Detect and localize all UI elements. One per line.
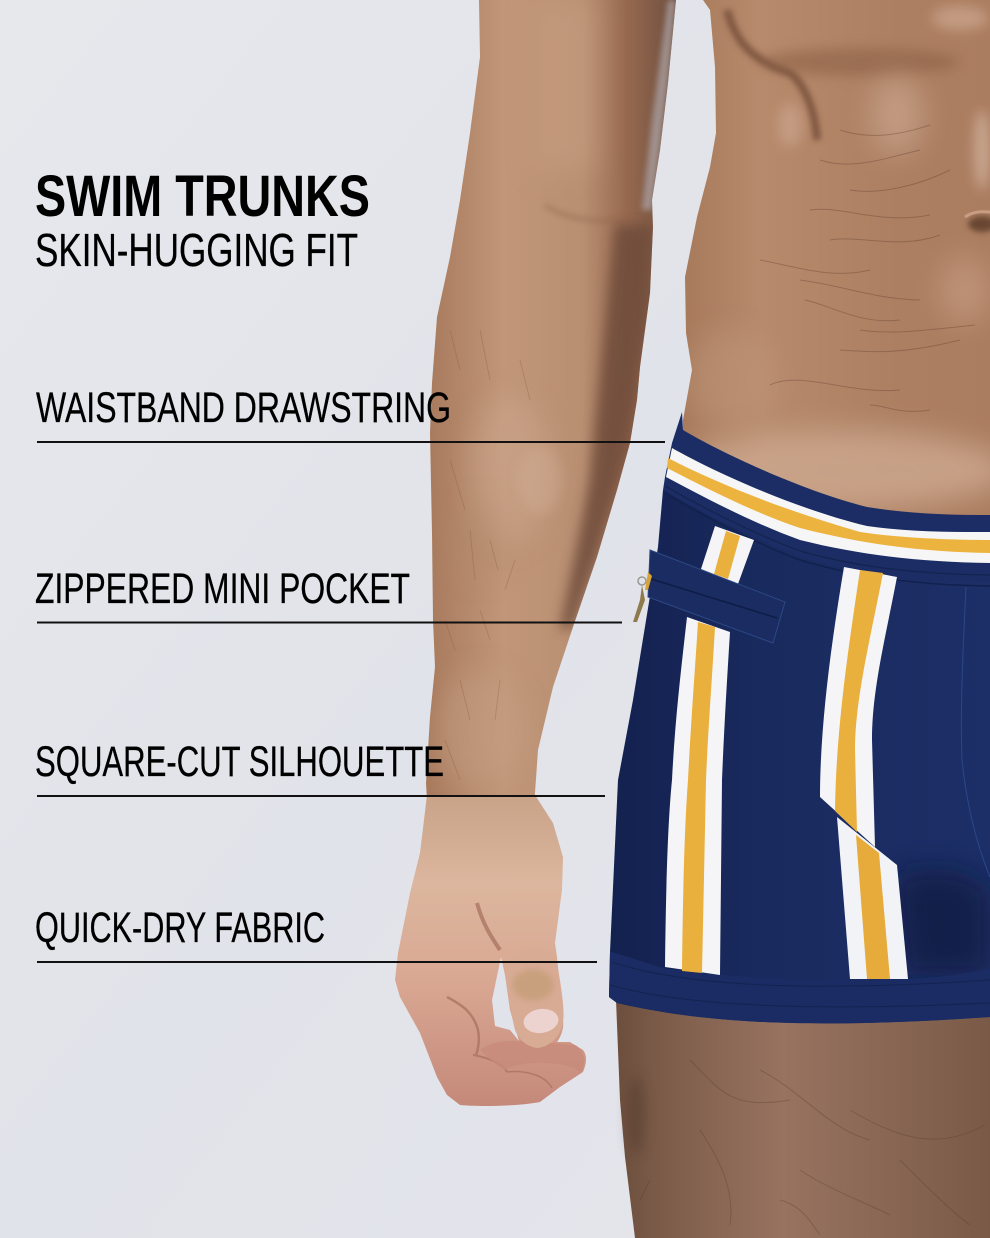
feature: square-cut silhouette: SQUARE-CUT SILHOUETTE xyxy=(35,738,444,786)
crotch shadow xyxy=(895,869,990,975)
pocket seam xyxy=(648,578,777,618)
light forearm patches xyxy=(472,408,539,528)
body hair xyxy=(760,125,975,411)
swim trunks xyxy=(609,412,990,1023)
feature: zippered mini pocket: ZIPPERED MINI POCKET xyxy=(35,565,410,613)
navel xyxy=(968,216,990,232)
left stripe yellow xyxy=(682,622,715,973)
grey edge reflection xyxy=(642,0,676,210)
lower abdomen glow xyxy=(670,430,990,510)
thumb xyxy=(505,948,564,1048)
centre stripe lower white xyxy=(837,817,908,979)
title: SWIM TRUNKS xyxy=(35,164,370,229)
centre stripe upper white xyxy=(820,567,897,847)
left stripe white xyxy=(665,617,730,975)
forearm xyxy=(425,0,680,800)
shoulder highlight xyxy=(574,25,576,144)
subtitle: SKIN-HUGGING FIT xyxy=(35,224,358,276)
fly seam xyxy=(961,587,990,877)
pocket stripe white xyxy=(701,526,754,584)
pocket flap xyxy=(648,550,785,643)
arm hair xyxy=(445,330,530,780)
hand xyxy=(395,795,586,1106)
hem xyxy=(609,952,990,1023)
feature: waistband drawstring: WAISTBAND DRAWSTRING xyxy=(36,384,451,432)
waistband seams xyxy=(665,493,990,586)
dark inner forearm xyxy=(560,225,653,630)
waistband xyxy=(663,412,990,583)
torso xyxy=(683,0,990,515)
trunks body xyxy=(609,490,990,1023)
centre stripe lower yellow xyxy=(856,835,890,979)
elbow crease xyxy=(546,204,596,222)
centre stripe upper yellow xyxy=(835,570,883,832)
thumb nail xyxy=(522,1007,560,1035)
palm creases xyxy=(447,903,552,1088)
chest shadow xyxy=(727,10,817,140)
fingers xyxy=(480,1041,584,1072)
waistband white stripe xyxy=(666,448,990,563)
feature: quick-dry fabric: QUICK-DRY FABRIC xyxy=(35,904,325,952)
leg xyxy=(616,1000,990,1238)
pocket stripe yellow xyxy=(714,531,740,579)
zipper pull xyxy=(633,572,652,622)
gap between fingers and thumb xyxy=(492,957,519,1041)
waistband yellow stripe xyxy=(667,458,990,553)
